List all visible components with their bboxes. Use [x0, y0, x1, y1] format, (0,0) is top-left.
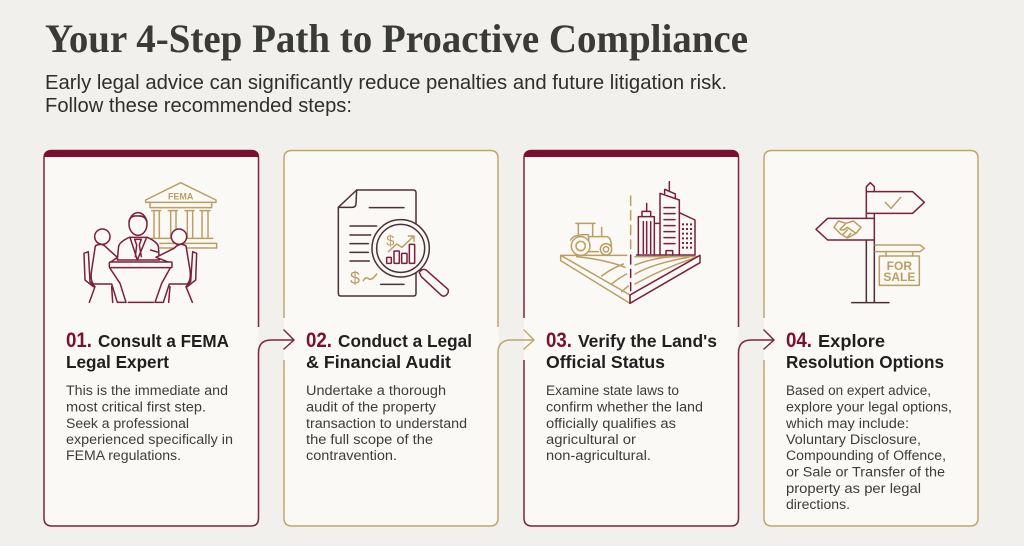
- heading 1: Consult a FEMA: [98, 331, 229, 351]
- heading 3: 03.: [546, 329, 572, 352]
- subtitle: [45, 71, 727, 117]
- arrow: step 2 to step 3: [498, 330, 534, 353]
- icon: signpost with for sale sign: [816, 183, 924, 303]
- body text 4: Compounding of Offence,: [786, 448, 946, 464]
- field: [561, 255, 700, 303]
- body text 2: [306, 383, 467, 464]
- body text 4: directions.: [786, 497, 850, 513]
- card 4 border: [764, 150, 978, 526]
- body text 1: FEMA regulations.: [66, 448, 181, 464]
- body text 4: which may include:: [785, 416, 909, 432]
- heading 3: Verify the Land's: [578, 331, 717, 351]
- for sale sign: FOR: [887, 259, 912, 273]
- heading 2: 02.: [306, 329, 332, 352]
- body text 3: officially qualifies as: [546, 416, 676, 432]
- heading 4: [786, 329, 944, 372]
- heading 4: 04.: [786, 329, 812, 352]
- heading 2: Conduct a Legal: [338, 331, 472, 351]
- card 3 background: [524, 150, 738, 526]
- panel: step 2 legal and financial audit: [284, 150, 498, 526]
- body text 1: [66, 383, 233, 464]
- arrow: step 1 to step 2: [258, 330, 294, 353]
- body text 1: experienced specifically in: [66, 432, 233, 448]
- document: $: [350, 268, 360, 288]
- heading 4: Resolution Options: [786, 352, 944, 372]
- magnifying glass: $: [386, 233, 394, 249]
- icon: farmland and city split: [561, 182, 700, 303]
- subtitle: Follow these recommended steps:: [45, 94, 352, 117]
- body text 1: most critical first step.: [66, 400, 206, 416]
- heading 3: Official Status: [546, 352, 665, 372]
- card 2 background: [284, 150, 498, 526]
- arrow: step 3 to step 4: [738, 330, 774, 353]
- panel: step 1 consult a FEMA legal expert: [44, 150, 259, 526]
- left arrow sign with handshake: [816, 218, 874, 240]
- city buildings: [637, 182, 695, 255]
- card 1 top bar: [44, 150, 259, 157]
- body text 3: non-agricultural.: [546, 448, 651, 464]
- heading 1: 01.: [66, 329, 92, 352]
- body text 4: property as per legal: [786, 481, 921, 497]
- body text 4: explore your legal options,: [786, 400, 952, 416]
- title: Your 4-Step Path to Proactive Compliance: [45, 16, 748, 61]
- boundary dashed line: [628, 196, 633, 291]
- table: [109, 262, 172, 302]
- body text 3: [546, 383, 703, 464]
- building: FEMA: [168, 191, 194, 201]
- client right: [155, 229, 197, 302]
- client left: [84, 229, 126, 302]
- body text 4: or Sale or Transfer of the: [786, 464, 945, 480]
- body text 4: [785, 383, 952, 513]
- body text 3: agricultural or: [546, 432, 636, 448]
- subtitle: Early legal advice can significantly reduce penalties and future litigation risk.: [45, 71, 727, 94]
- tractor: [571, 223, 612, 255]
- body text 1: This is the immediate and: [66, 383, 228, 399]
- right arrow sign with check: [866, 192, 924, 213]
- for sale sign: [875, 245, 924, 285]
- card 3 border: [524, 150, 738, 526]
- body text 2: audit of the property: [306, 400, 437, 416]
- body text 4: Based on expert advice,: [786, 383, 931, 399]
- card 3 top bar: [524, 150, 739, 157]
- heading 2: & Financial Audit: [306, 352, 451, 372]
- lawyer: [117, 213, 159, 260]
- body text 2: contravention.: [306, 448, 397, 464]
- panel: step 4 explore resolution options: [764, 150, 978, 526]
- heading 3: [546, 329, 717, 372]
- icon: document under magnifying glass: [338, 190, 448, 296]
- card 4 background: [764, 150, 978, 526]
- panel: step 3 verify land status: [524, 150, 739, 526]
- icon: meeting with lawyer before FEMA building: [84, 183, 217, 302]
- card 1 border: [44, 150, 258, 526]
- body text 4: Voluntary Disclosure,: [786, 432, 921, 448]
- card 2 border: [284, 150, 498, 526]
- body text 2: Undertake a thorough: [306, 383, 446, 399]
- for sale sign: SALE: [883, 270, 915, 284]
- heading 1: Legal Expert: [66, 352, 169, 372]
- post: [852, 183, 889, 303]
- body text 2: the full scope of the: [306, 432, 433, 448]
- body text 2: transaction to understand: [306, 416, 467, 432]
- body text 3: Examine state laws to: [546, 383, 679, 399]
- heading 2: [306, 329, 472, 372]
- body text 1: Seek a professional: [66, 416, 189, 432]
- card 1 background: [44, 150, 258, 526]
- heading 4: Explore: [818, 331, 885, 351]
- heading 1: [66, 329, 229, 372]
- body text 3: confirm whether the land: [546, 400, 703, 416]
